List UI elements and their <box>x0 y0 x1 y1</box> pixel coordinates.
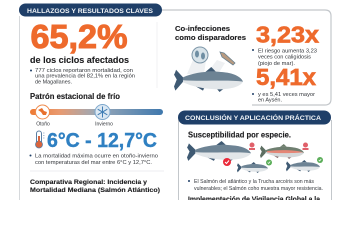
text block: mortalidad máxima: La mortalidad máxima ocurre en otoño-invierno <box>35 154 158 160</box>
icon: thermometer <box>36 131 44 148</box>
heading: co-infecciones <box>175 24 246 42</box>
text block: 777 ciclos: una prevalencia del 82,1% en la región <box>35 74 135 80</box>
heading: comparativa regional: Mortalidad Mediana (Salmón Atlántico) <box>30 187 160 194</box>
icon: sea louse <box>220 52 235 65</box>
stat: 5,41x: 5,41x <box>256 64 316 90</box>
text block: 777 ciclos: de Magallanes. <box>35 79 72 85</box>
icon: green check 2 <box>317 157 323 163</box>
subheading: susceptibilidad: Susceptibilidad por especie. <box>188 130 291 140</box>
illustration: species comparison <box>187 141 323 173</box>
icon: rainbow trout <box>260 144 304 159</box>
heading: conclusión pill <box>178 110 331 124</box>
text block: riesgo: (piojo de mar). <box>258 61 295 67</box>
label: otoño: Otoño <box>36 122 50 128</box>
heading: hallazgos pill <box>19 4 162 16</box>
text block: aysén: en Aysén. <box>258 98 282 104</box>
heading: co-infecciones: Co-infecciones <box>175 24 230 33</box>
icon: atlantic salmon <box>187 141 251 162</box>
icon: red check <box>223 158 231 166</box>
icon: skull 2 <box>302 142 308 150</box>
panel: conclusión frame <box>178 120 332 200</box>
icon: coho salmon right <box>286 160 320 172</box>
big stat: 65,2%: 65,2% <box>30 18 128 55</box>
icon: coho salmon small <box>237 162 268 173</box>
text block: aysén: y es 5,41 veces mayor <box>258 92 315 98</box>
icon: microbe <box>192 47 208 63</box>
text block: vulnerables <box>188 179 323 192</box>
text block: aysén <box>252 92 315 104</box>
icon: invierno snowflake <box>95 104 110 120</box>
panel: hallazgos frame <box>20 10 331 200</box>
heading: co-infecciones: como disparadores <box>175 33 246 42</box>
label: invierno: Invierno <box>95 122 113 128</box>
big stat: temperature range: 6°C - 12,7°C <box>47 130 157 152</box>
heading: conclusión pill: CONCLUSIÓN Y APLICACIÓN PRÁCTICA <box>185 113 321 122</box>
text block: riesgo <box>252 48 317 67</box>
stat: 3,23x: 3,23x <box>256 22 319 48</box>
text block: riesgo: veces con caligidosis <box>258 55 312 61</box>
heading: comparativa regional <box>30 179 160 194</box>
icon: otoño leaf <box>36 105 50 119</box>
heading: comparativa regional: Comparativa Regional: Incidencia y <box>30 179 147 186</box>
text block: vulnerables: vulnerables; el Salmón coho muestra mayor resistencia. <box>194 186 323 192</box>
heading: hallazgos pill: HALLAZGOS Y RESULTADOS CLAVES <box>27 8 154 15</box>
icon: skull 1 <box>249 142 255 150</box>
text block: 777 ciclos: 777 ciclos reportaron mortalidad, con <box>35 68 133 74</box>
text block: mortalidad máxima <box>30 154 158 166</box>
text block: vulnerables: El Salmón del atlántico y la Trucha arcoíris son más <box>194 179 315 185</box>
subheading: ciclos afectados: de los ciclos afectados <box>30 55 129 66</box>
icon: salmon <box>174 67 243 92</box>
chart: seasonal slider <box>30 104 163 128</box>
illustration: fish with pathogens <box>174 47 243 92</box>
text block: 777 ciclos <box>30 68 135 85</box>
heading: patrón estacional: Patrón estacional de frío <box>30 92 120 101</box>
text block: mortalidad máxima: con temperaturas del mar entre 6°C y 12,7°C. <box>35 160 152 166</box>
text block: riesgo: El riesgo aumenta 3,23 <box>258 48 317 54</box>
icon: green check 1 <box>266 160 272 166</box>
